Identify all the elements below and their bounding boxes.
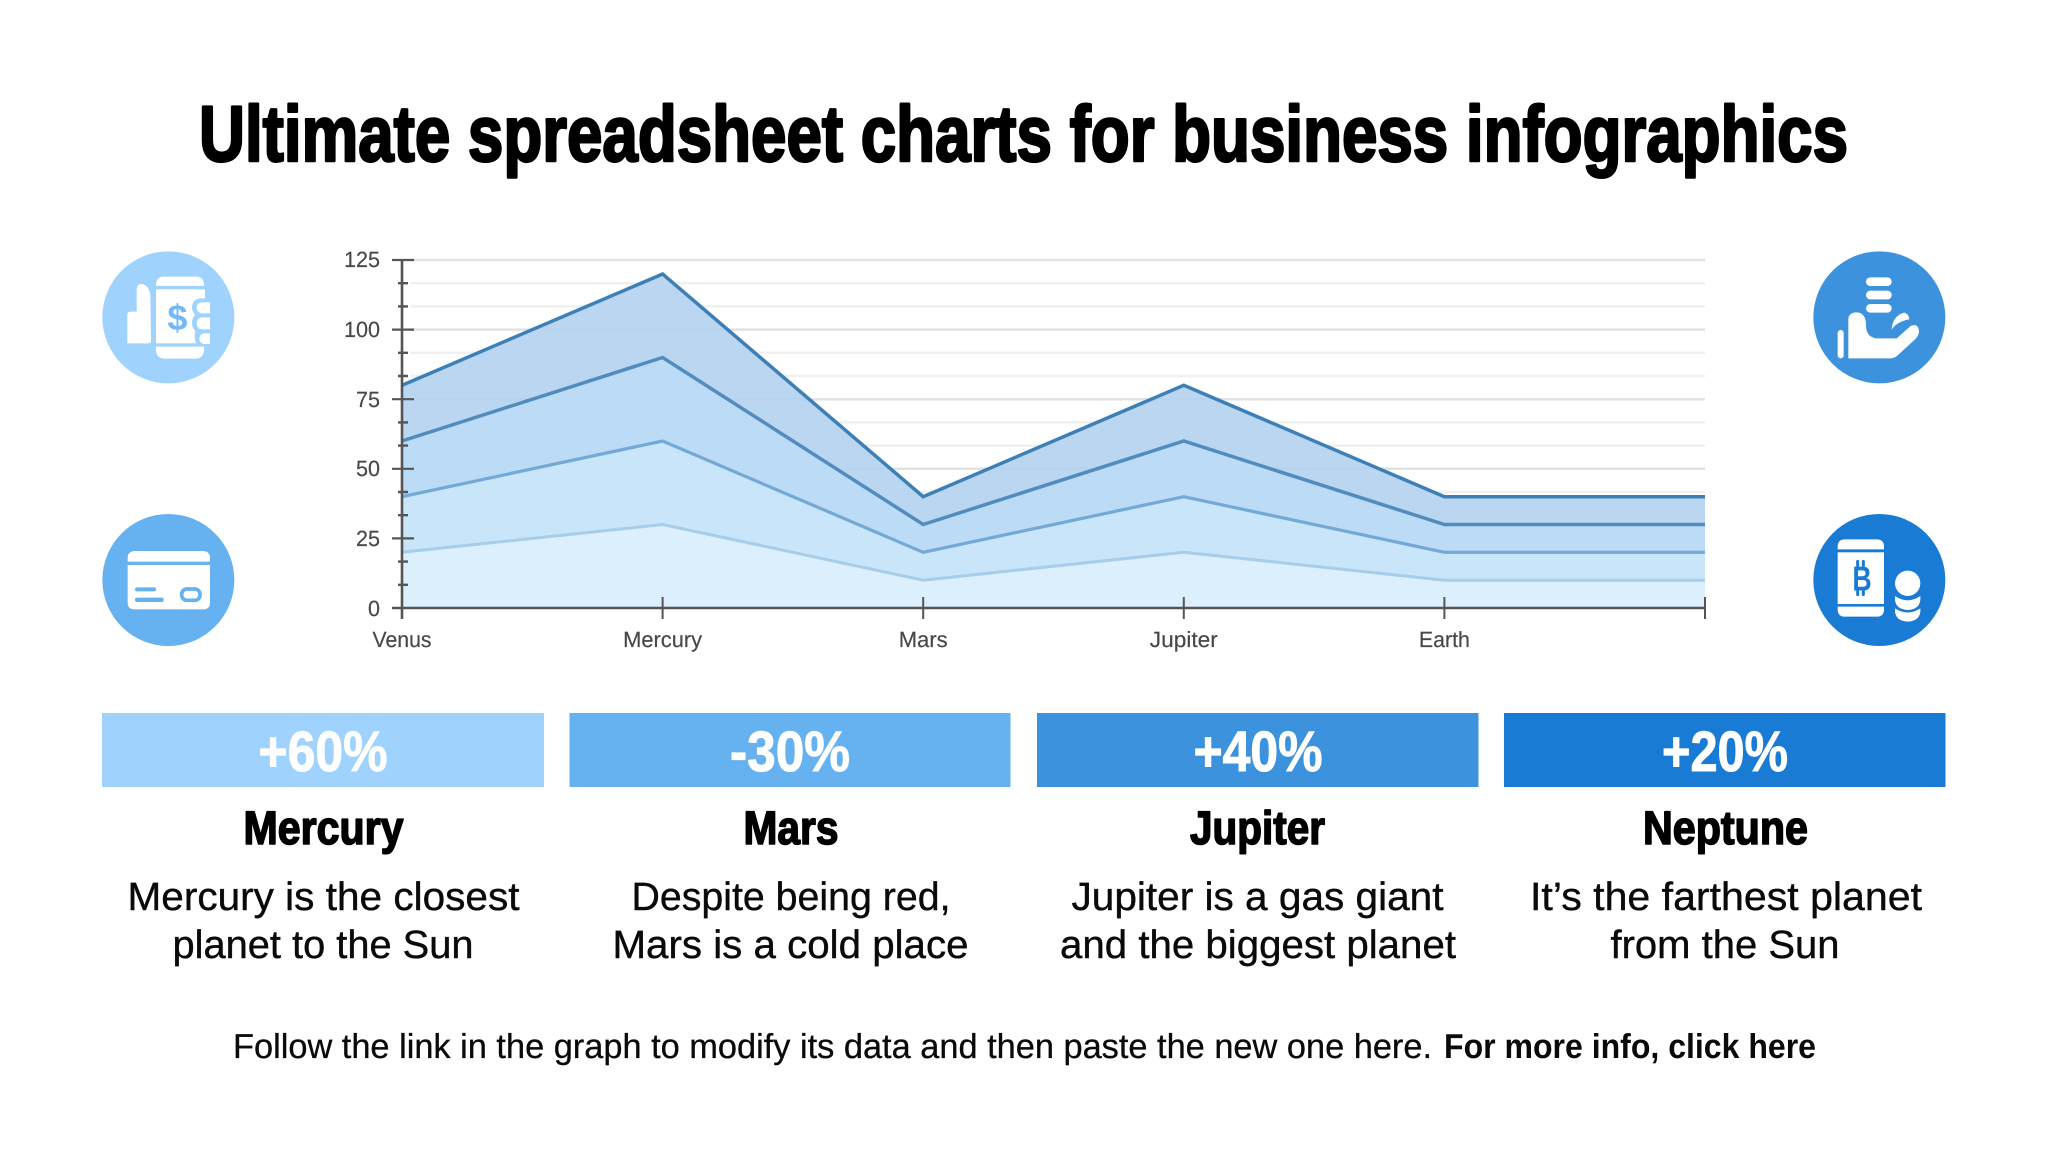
value: +40% [1194, 720, 1322, 784]
description [128, 875, 520, 967]
panel: Mars [570, 713, 1010, 967]
x axis labels: Venus [372, 627, 432, 652]
value: +20% [1662, 720, 1788, 784]
y axis labels: 0 [368, 596, 380, 621]
icon: hand holding coins [1813, 251, 1945, 383]
line series 3 [402, 441, 1705, 552]
y axis labels: 25 [356, 526, 380, 551]
x axis labels: Mars [899, 627, 948, 652]
icon: phone payment with thumbs up: $ [167, 297, 187, 338]
description: Jupiter is a gas giant [1072, 875, 1444, 919]
heading: Neptune [1643, 801, 1808, 854]
panel: Neptune [1504, 713, 1946, 967]
y axis labels: 75 [356, 387, 380, 412]
value bar [102, 713, 544, 787]
area series 1 (top) [402, 274, 1705, 608]
value: -30% [730, 720, 850, 784]
value bar [1037, 713, 1478, 787]
x axis labels: Earth [1419, 627, 1470, 652]
footer sentence: Follow the link in the graph to modify its data and then paste the new one here. [233, 1028, 1432, 1066]
x axis labels [372, 627, 1470, 652]
icon: credit card [102, 514, 234, 646]
description: Despite being red, [632, 875, 950, 919]
area series 3 [402, 441, 1705, 608]
icon: phone with bitcoin and coins [1813, 514, 1945, 646]
description: and the biggest planet [1060, 923, 1456, 967]
footer link: For more info, click here [1444, 1028, 1816, 1066]
line series 2 [402, 358, 1705, 524]
description [1060, 875, 1456, 967]
y axis labels: 50 [356, 456, 380, 481]
line series 4 [402, 524, 1705, 580]
description: It’s the farthest planet [1530, 875, 1922, 919]
heading: Jupiter [1190, 801, 1325, 854]
value: +60% [258, 720, 388, 784]
y axis labels: 100 [344, 317, 380, 342]
heading: Mars [744, 801, 838, 854]
description: Mars is a cold place [612, 923, 968, 967]
heading: Mercury [244, 801, 404, 854]
line series 1 [402, 274, 1705, 497]
area series 2 [402, 358, 1705, 608]
description: from the Sun [1610, 923, 1840, 967]
panel: Jupiter [1037, 713, 1478, 967]
description [1530, 875, 1922, 967]
description: Mercury is the closest [128, 875, 520, 919]
chart axes and tick marks [392, 260, 1705, 619]
footer note [233, 1028, 1816, 1066]
value bar [1504, 713, 1946, 787]
y axis labels: 125 [344, 247, 380, 272]
icon: phone with bitcoin and coins: B [1852, 560, 1872, 598]
description: planet to the Sun [172, 923, 474, 967]
panel: Mercury [102, 713, 544, 967]
area series 4 (bottom) [402, 524, 1705, 608]
chart gridlines [410, 260, 1705, 585]
x axis labels: Mercury [623, 627, 702, 652]
x axis labels: Jupiter [1150, 627, 1218, 652]
value bar [570, 713, 1010, 787]
y axis labels [344, 247, 380, 621]
description [612, 875, 968, 967]
stacked area chart [344, 247, 1705, 652]
icon: phone payment with thumbs up [102, 251, 234, 383]
